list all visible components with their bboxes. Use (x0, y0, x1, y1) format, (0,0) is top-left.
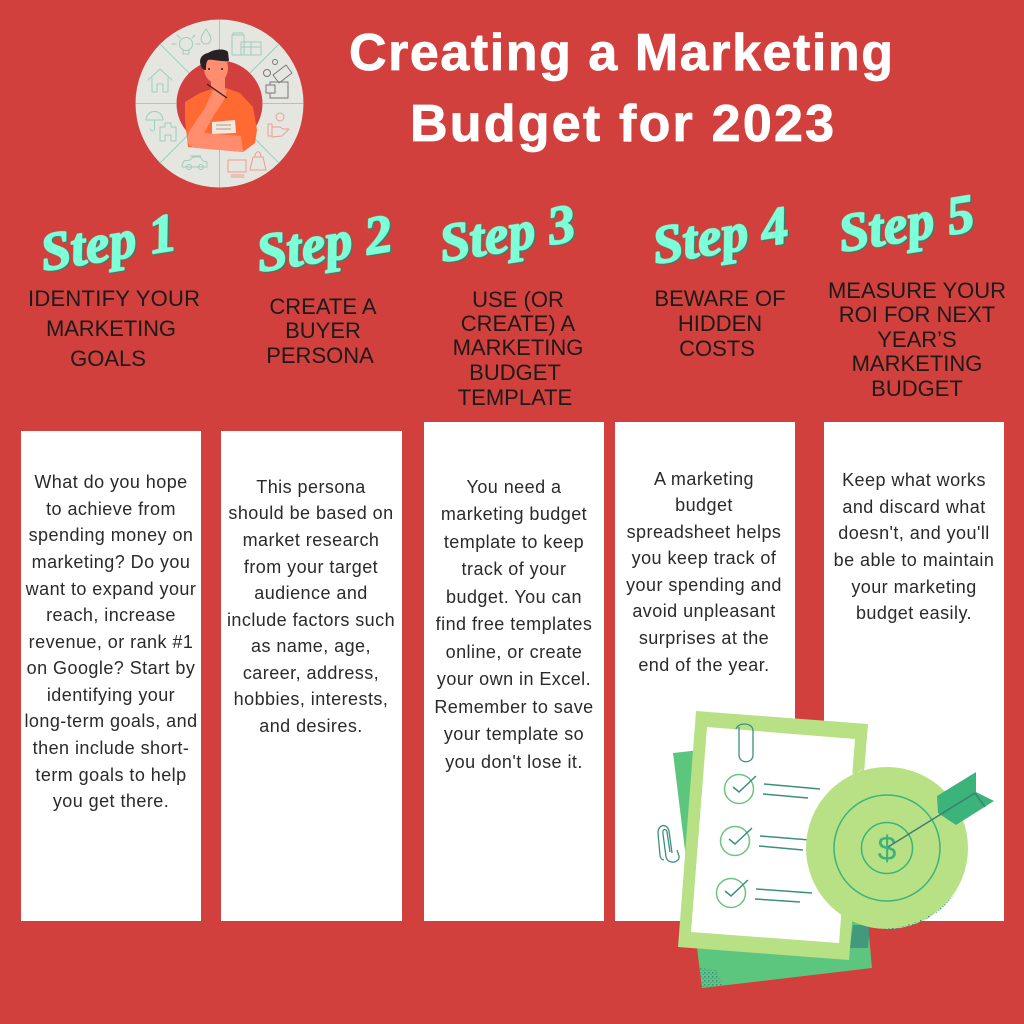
step 1 body text: on Google? Start by (27, 658, 195, 678)
step 1 body text: long-term goals, and (24, 711, 198, 731)
icon: umbrella and building (146, 112, 176, 141)
front sheet (678, 711, 868, 960)
step 1 body text: reach, increase (46, 605, 176, 625)
inner red circle (176, 60, 262, 146)
step 5 heading: BUDGET (871, 376, 963, 401)
step 1 card (21, 431, 201, 921)
step 3 body text: find free templates (436, 614, 592, 634)
step 1 heading: GOALS (70, 346, 146, 371)
step 4 body text: your spending and (626, 575, 782, 595)
checklist item 2 (720, 826, 810, 856)
icon: hand with coin (268, 113, 289, 137)
icon: shopping bag and monitor (228, 152, 266, 177)
step 2 body text: and desires. (259, 716, 363, 736)
icon: car (182, 156, 207, 170)
step 1 body text: then include short- (33, 738, 189, 758)
step 3 heading: MARKETING (453, 335, 583, 360)
step 1 body text: marketing? Do you (32, 552, 190, 572)
step 4 body text: you keep track of (632, 548, 777, 568)
checklist item 3 (716, 878, 812, 908)
step 3 body text: track of your (462, 559, 566, 579)
title: Budget for 2023 (410, 95, 834, 153)
step 1 body text: revenue, or rank #1 (29, 632, 193, 652)
step 5 label: Step 5 (834, 183, 978, 264)
top paperclip (736, 724, 753, 762)
step 3 body text: your template so (444, 724, 584, 744)
step 2 column (221, 203, 402, 921)
step 3 card (424, 422, 604, 921)
checklist item 1 (724, 774, 820, 804)
step 5 body text: Keep what works (842, 470, 986, 490)
icon: boxes (232, 33, 261, 55)
step 2 body text: should be based on (228, 503, 394, 523)
left paperclip (658, 826, 679, 862)
wheel (136, 20, 304, 188)
step 2 card (221, 431, 402, 921)
step 3 body text: You need a (467, 477, 562, 497)
step 3 body text: you don't lose it. (445, 752, 583, 772)
step 1 body text: spending money on (29, 525, 193, 545)
icon: thinking man in budget wheel (136, 20, 304, 188)
step 2 body text: market research (243, 530, 379, 550)
man: torso (185, 88, 257, 152)
step 2 body text: career, address, (243, 663, 379, 683)
step 5 body text: your marketing (851, 577, 977, 597)
step 4 body text: avoid unpleasant (632, 601, 776, 621)
step 2 body text: This persona (256, 477, 366, 497)
paper (691, 727, 855, 943)
step 5 body text: be able to maintain (834, 550, 994, 570)
step 2 heading: CREATE A (269, 294, 377, 319)
step 3 body text: Remember to save (434, 697, 594, 717)
step 4 label: Step 4 (648, 195, 792, 276)
step 3 heading: TEMPLATE (458, 385, 572, 410)
step 3 body text: marketing budget (441, 504, 587, 524)
man: card (212, 120, 236, 134)
step 3 body text: template to keep (444, 532, 584, 552)
man: arm (187, 88, 243, 152)
dollar sign: $ (878, 830, 897, 868)
step 3 heading: BUDGET (469, 360, 561, 385)
step 5 column (824, 183, 1006, 921)
step 3 body text: budget. You can (446, 587, 582, 607)
arrow (888, 772, 994, 847)
step 1 label: Step 1 (36, 202, 180, 283)
step 5 heading: ROI FOR NEXT (839, 302, 995, 327)
step 2 heading: BUYER (285, 318, 361, 343)
man: face details (209, 68, 222, 70)
step 2 label: Step 2 (252, 203, 396, 284)
step 2 body text: hobbies, interests, (234, 689, 388, 709)
step 3 label: Step 3 (435, 193, 579, 274)
step 5 body text: doesn't, and you'll (838, 523, 990, 543)
step 4 body text: budget (675, 495, 733, 515)
step 4 body text: surprises at the (639, 628, 769, 648)
back sheet (673, 750, 872, 988)
step 4 card (615, 422, 795, 921)
step 3 body text: online, or create (446, 642, 582, 662)
step 4 body text: A marketing (654, 469, 754, 489)
step 5 heading: MARKETING (852, 351, 982, 376)
step 1 heading: MARKETING (46, 316, 176, 341)
step 4 body text: spreadsheet helps (627, 522, 781, 542)
illustration: checklist and target (658, 711, 994, 988)
step 5 heading: MEASURE YOUR (828, 278, 1006, 303)
man: neck and head (211, 75, 225, 93)
step 5 heading: YEAR’S (877, 327, 957, 352)
step 4 heading: BEWARE OF (654, 286, 786, 311)
step 3 heading: CREATE) A (461, 311, 576, 336)
step 1 body text: to achieve from (46, 499, 176, 519)
step 1 column (21, 202, 201, 921)
step 3 column (424, 193, 604, 921)
step 4 heading: COSTS (679, 336, 755, 361)
step 2 heading: PERSONA (266, 343, 374, 368)
icon: money and wallet (264, 60, 292, 98)
step 4 heading: HIDDEN (678, 311, 762, 336)
step 5 card (824, 422, 1004, 921)
step 4 body text: end of the year. (638, 655, 770, 675)
man: pen (207, 84, 227, 98)
step 3 body text: your own in Excel. (437, 669, 591, 689)
step 2 body text: include factors such (227, 610, 395, 630)
step 2 body text: as name, age, (251, 636, 371, 656)
target (806, 767, 968, 929)
step 2 body text: audience and (254, 583, 368, 603)
wheel dividers (136, 20, 304, 188)
icon: house (148, 69, 172, 92)
step 1 body text: want to expand your (25, 579, 196, 599)
step 1 body text: term goals to help (35, 765, 187, 785)
step 1 body text: What do you hope (34, 472, 188, 492)
step 5 body text: and discard what (842, 497, 986, 517)
step 4 column (615, 195, 795, 921)
step 5 body text: budget easily. (856, 603, 972, 623)
step 3 heading: USE (OR (472, 287, 564, 312)
title: Creating a Marketing (349, 24, 893, 82)
step 1 body text: you get there. (53, 791, 169, 811)
step 2 body text: from your target (244, 557, 378, 577)
man: hair (200, 49, 229, 70)
icon: light bulb and drop (172, 29, 211, 54)
step 1 heading: IDENTIFY YOUR (28, 286, 200, 311)
step 1 body text: identifying your (47, 685, 175, 705)
